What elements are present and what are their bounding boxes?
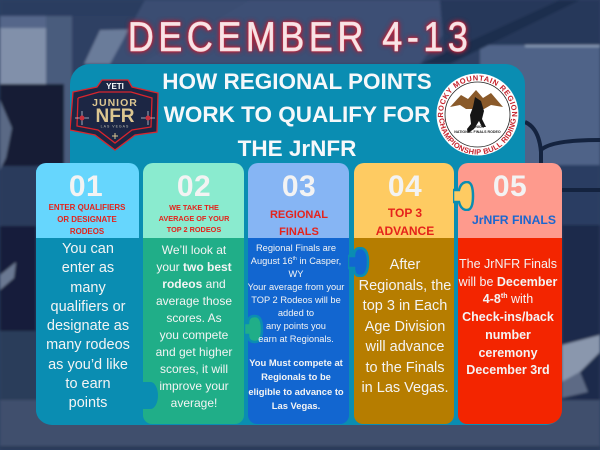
card 05: December 3rd (466, 363, 550, 377)
panel title: THE JrNFR (238, 136, 356, 161)
card 03: 03 (282, 170, 316, 203)
card 01: to earn (65, 376, 111, 392)
card 03: eligible to advance to (248, 386, 344, 397)
card 02: you compete (160, 328, 228, 342)
card 01: RODEOS (70, 227, 104, 236)
card 01: many rodeos (46, 337, 130, 353)
card 04: top 3 in Each (363, 298, 447, 314)
card 02 (143, 163, 244, 424)
puzzle tab (143, 382, 158, 409)
card 04 (348, 163, 454, 424)
card 01: 01 (69, 170, 103, 203)
card 03: Regional Finals are (256, 243, 336, 253)
logo: Rocky Mountain Region (436, 74, 518, 156)
card 03: Las Vegas. (272, 400, 320, 411)
logo: Rocky Mountain Region: CHAMPIONSHIP BULL RIDING (439, 118, 516, 154)
card 01: qualifiers or (51, 299, 125, 315)
card 01: designate as (47, 318, 129, 334)
logo: Rocky Mountain Region: ROCKY MOUNTAIN REGION (438, 75, 518, 118)
card 02: WE TAKE THE (169, 203, 219, 212)
card 05: number (485, 328, 531, 342)
logo: Rocky Mountain Region: JUNIOR (471, 125, 485, 129)
card 01: many (70, 280, 106, 296)
card 05: ceremony (478, 346, 538, 360)
card 01: as you’d like (48, 357, 128, 373)
card 04: TOP 3 (388, 206, 422, 220)
card 04: ADVANCE (376, 224, 434, 238)
card 02: scores, it will (160, 362, 228, 376)
card 02: TOP 2 RODEOS (167, 225, 221, 234)
card 03: any points you (266, 321, 326, 331)
card 05: Check-ins/back (462, 310, 554, 324)
logo: Rocky Mountain Region: NATIONAL FINALS RODEO (454, 130, 501, 134)
panel title (162, 69, 432, 161)
card 03: You Must compete at (249, 357, 343, 368)
card 03: WY (288, 269, 303, 279)
puzzle tab (453, 181, 474, 211)
card 01: points (69, 395, 107, 411)
card 04: Age Division (365, 318, 445, 334)
puzzle tab (348, 247, 370, 277)
logo: Yeti Junior NFR: JUNIOR (92, 97, 138, 109)
card 05: will be December (459, 275, 557, 289)
card 03: Your average from your (248, 282, 344, 292)
card 01 (36, 163, 139, 422)
card 02: average those (156, 294, 232, 308)
card 03: August 16th in Casper, (251, 256, 341, 266)
card 02: average! (171, 396, 217, 410)
card 02: We’ll look at (162, 243, 226, 257)
card 05: JrNFR FINALS (472, 213, 556, 227)
card 04: in Las Vegas. (361, 380, 449, 396)
card 01: You can (62, 241, 114, 257)
card 04: After (390, 257, 420, 273)
card 03 (245, 163, 349, 424)
card 05: The JrNFR Finals (459, 257, 557, 271)
logo: Yeti Junior NFR: YETI (106, 82, 124, 91)
card 04: Regionals, the (359, 278, 451, 294)
card 05: 05 (493, 170, 527, 203)
logo: Yeti Junior NFR (70, 79, 159, 151)
card 05 (453, 163, 562, 424)
card 05: 4-8th with (483, 292, 533, 306)
card 02: and get higher (156, 345, 232, 359)
card 01: ENTER QUALIFIERS (49, 203, 125, 212)
logo: Yeti Junior NFR: LAS VEGAS (101, 124, 129, 128)
puzzle tab (245, 314, 264, 344)
card 02: AVERAGE OF YOUR (159, 214, 229, 223)
card 04: 04 (388, 170, 422, 203)
card 04: to the Finals (365, 360, 444, 376)
card 02: improve your (159, 379, 229, 393)
card 04: will advance (365, 339, 444, 355)
card 03: REGIONAL (270, 209, 328, 221)
panel title: WORK TO QUALIFY FOR (164, 102, 430, 127)
panel title: HOW REGIONAL POINTS (162, 69, 432, 94)
card 03: earn at Regionals. (258, 334, 334, 344)
logo: Yeti Junior NFR: NFR (95, 106, 135, 127)
card 02: your two best (156, 260, 232, 274)
card 01: enter as (62, 260, 114, 276)
card 03: TOP 2 Rodeos will be (251, 295, 341, 305)
card 03: Regionals to be (261, 371, 331, 382)
card 02: rodeos and (162, 277, 226, 291)
card 03: added to (278, 308, 314, 318)
card 02: scores. As (166, 311, 222, 325)
card 01: OR DESIGNATE (57, 215, 117, 224)
card 02: 02 (177, 170, 211, 203)
date heading: DECEMBER 4-13 (128, 13, 472, 60)
card 03: FINALS (279, 226, 319, 238)
